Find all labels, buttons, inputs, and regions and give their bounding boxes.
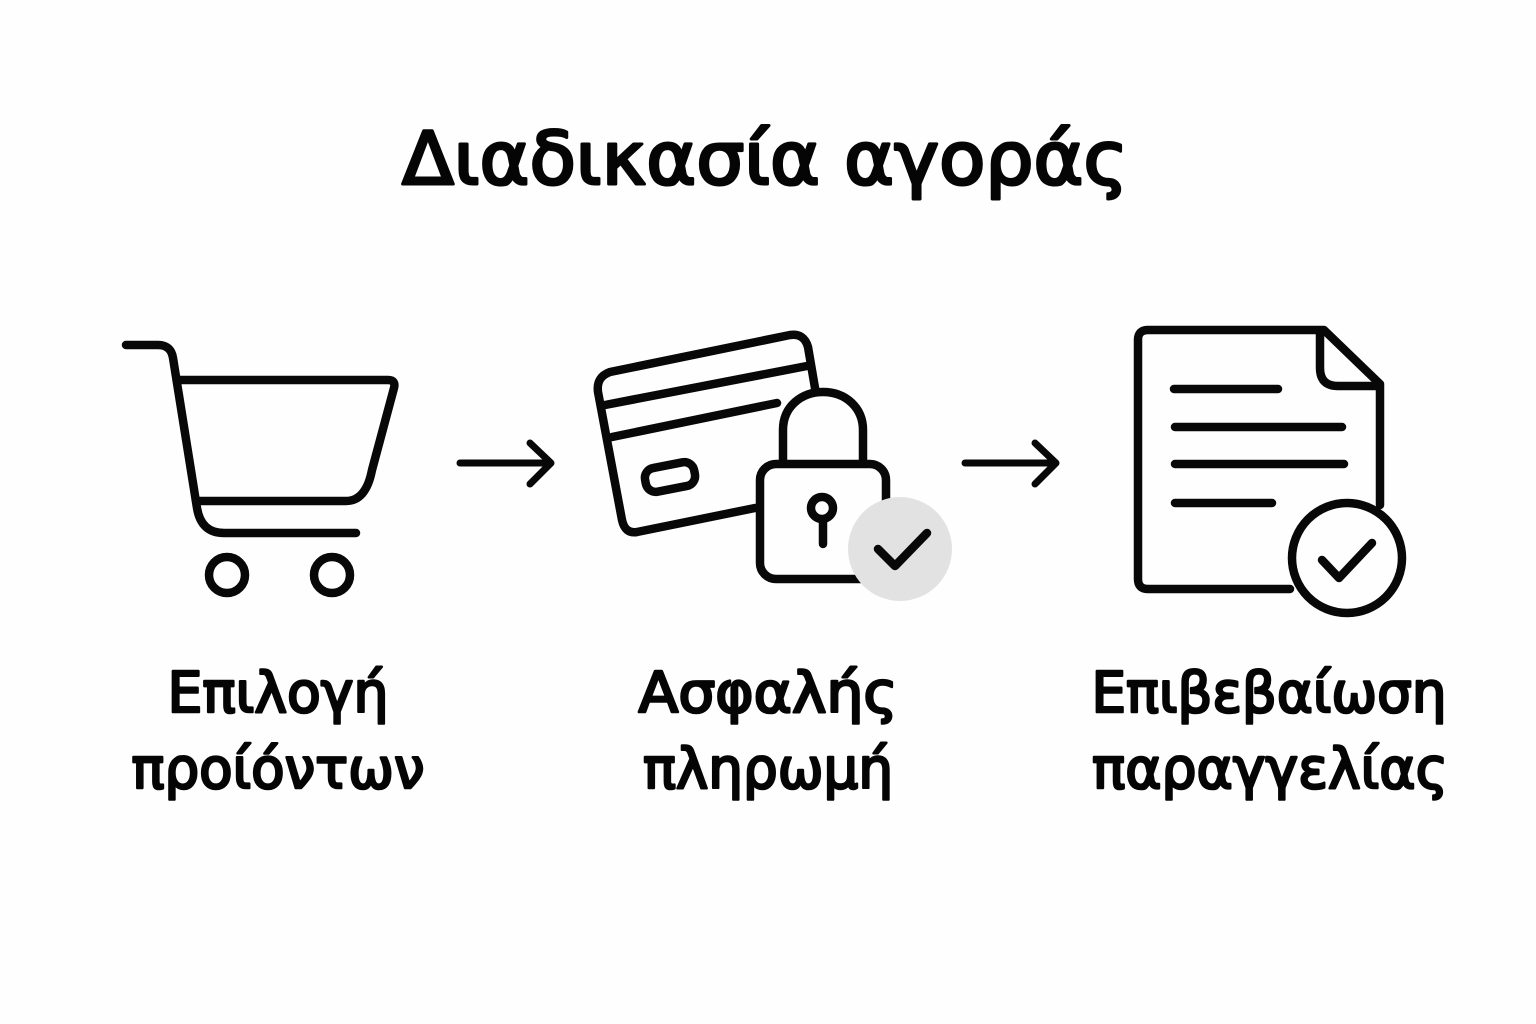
icon: shopping cart bbox=[126, 345, 394, 593]
check badge bbox=[848, 497, 952, 601]
check badge bbox=[1292, 503, 1402, 613]
arrow: payment to confirmation bbox=[965, 443, 1056, 484]
title: Διαδικασία αγοράς bbox=[402, 117, 1128, 202]
icon: credit card with padlock bbox=[598, 335, 952, 601]
padlock bbox=[760, 392, 886, 579]
label: step 3: παραγγελίας bbox=[1092, 737, 1448, 802]
label: step 3: Επιβεβαίωση bbox=[1092, 661, 1446, 726]
label: step 1: προίόντων bbox=[132, 737, 424, 802]
label: step 2: πληρωμή bbox=[643, 737, 893, 802]
document bbox=[1138, 330, 1380, 589]
label: step 1: Επιλογή bbox=[168, 661, 388, 726]
arrow: cart to payment bbox=[460, 443, 551, 484]
credit card bbox=[598, 335, 815, 532]
label: step 2 bbox=[638, 661, 898, 802]
label: step 3 bbox=[1092, 661, 1448, 802]
label: step 2: Ασφαλής bbox=[638, 661, 898, 726]
label: step 1 bbox=[132, 661, 424, 802]
icon: document with check bbox=[1138, 330, 1402, 613]
